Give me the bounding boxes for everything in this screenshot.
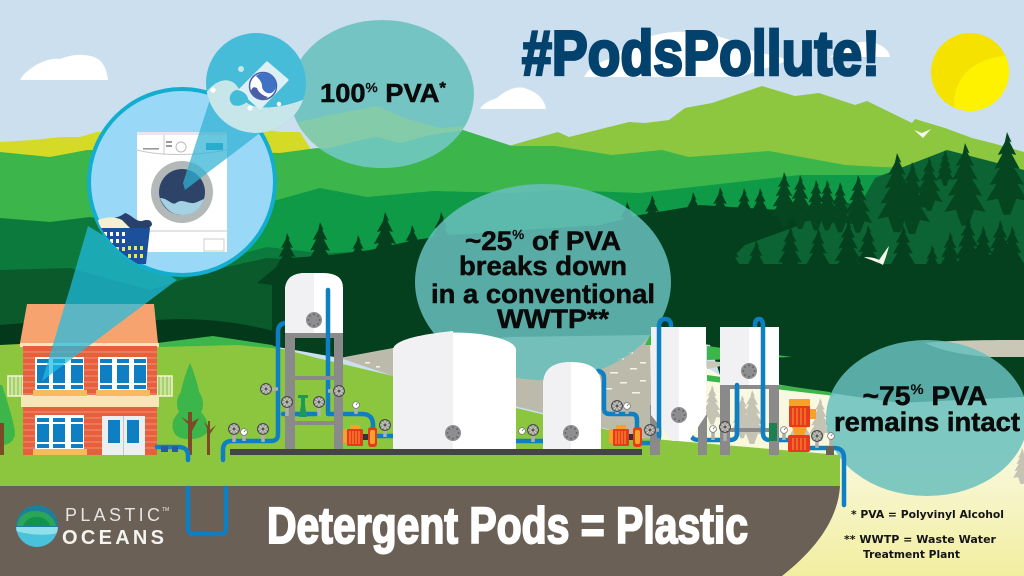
text: 75% remains intact: PVA bbox=[924, 381, 988, 411]
footnote: WWTP: Treatment Plant bbox=[863, 549, 960, 561]
brick wall bbox=[23, 346, 157, 455]
door bbox=[102, 416, 145, 455]
dark forest mass bbox=[257, 205, 1024, 403]
text: 75% remains intact: % bbox=[911, 381, 924, 397]
text: 100% PVA: % bbox=[366, 80, 378, 95]
dark foreground-top trees bbox=[770, 132, 1024, 234]
house bbox=[8, 304, 172, 455]
tree centre bbox=[172, 363, 208, 455]
circle: washing machine bbox=[89, 89, 275, 275]
roof bbox=[20, 304, 158, 343]
logo: Plastic Oceans: OCEANS bbox=[62, 527, 164, 549]
text: 25% breaks down: % bbox=[512, 227, 525, 242]
laundry basket bbox=[98, 213, 152, 264]
footnotes bbox=[844, 509, 1004, 561]
platform bbox=[230, 449, 642, 455]
pump 3 vertical bbox=[788, 399, 816, 452]
text: 25% breaks down: in a conventional bbox=[431, 279, 655, 309]
logo: Plastic Oceans bbox=[16, 505, 169, 549]
upper windows bbox=[35, 357, 147, 449]
pipes bbox=[157, 290, 844, 534]
floor band bbox=[21, 395, 159, 407]
tank: elevated bbox=[285, 273, 343, 449]
footnote: PVA: * PVA = Polyvinyl Alcohol bbox=[851, 509, 1004, 521]
mid forest layer bbox=[700, 150, 1024, 290]
grass ground bbox=[0, 344, 840, 487]
text: 100% PVA: PVA bbox=[378, 78, 440, 108]
bare tree bbox=[204, 421, 216, 455]
pump 1 bbox=[343, 425, 377, 447]
tank: medium bbox=[543, 362, 601, 449]
text: 75% remains intact: remains intact bbox=[834, 407, 1020, 437]
text: 100% PVA: 100 bbox=[320, 78, 363, 108]
text: 25% breaks down: of PVA bbox=[524, 226, 621, 256]
tank: raised square bbox=[720, 327, 779, 455]
beam: washer to pod bbox=[183, 90, 260, 190]
title: #PodsPollute! bbox=[522, 19, 880, 89]
left tree line bbox=[274, 187, 773, 287]
darker green hills bbox=[90, 175, 1024, 340]
icon: pod bbox=[240, 63, 287, 108]
tank: hopper bbox=[650, 327, 707, 455]
bubble: 25% breaks down bbox=[415, 184, 671, 380]
logo: Plastic Oceans: TM bbox=[162, 507, 169, 513]
headline: Detergent Pods = Plastic: Detergent Pods = Plastic bbox=[267, 497, 748, 554]
trees bbox=[0, 363, 216, 455]
bubble: 75% remains intact bbox=[826, 340, 1024, 496]
balconies bbox=[8, 376, 172, 396]
circle: detergent pod bbox=[205, 33, 310, 135]
lower forest pines bbox=[686, 218, 1024, 298]
icon: birds bbox=[864, 129, 931, 265]
icon: sun bbox=[931, 33, 1012, 115]
footnote: WWTP bbox=[844, 534, 997, 561]
tree left edge bbox=[0, 385, 15, 455]
valves and gauges bbox=[161, 384, 834, 455]
pump 2 bbox=[609, 425, 642, 447]
clouds bbox=[20, 32, 890, 109]
bubble: 100% PVA bbox=[294, 20, 474, 168]
mid green hills bbox=[0, 130, 1024, 320]
text: 25% breaks down: breaks down bbox=[459, 251, 627, 281]
solid lower forest bbox=[640, 264, 1024, 298]
text: 25% breaks down: ~25 bbox=[465, 226, 511, 256]
forest bbox=[257, 132, 1024, 403]
river area with grey trees bbox=[340, 333, 1024, 576]
light green mountain bbox=[460, 86, 1024, 300]
logo mark bbox=[16, 505, 58, 548]
text: 100% PVA: * bbox=[439, 80, 447, 97]
darkest band and light strip above lawn bbox=[0, 318, 300, 360]
soil ground band bbox=[0, 486, 840, 576]
beam: house to washer bbox=[42, 226, 177, 381]
washing machine bbox=[137, 132, 227, 252]
text: 75% remains intact bbox=[834, 381, 1020, 437]
footnote: WWTP: ** WWTP = Waste Water bbox=[844, 534, 997, 546]
yellow-green ridge bbox=[0, 132, 310, 200]
text: 75% remains intact: ~75 bbox=[862, 381, 908, 411]
text: 25% breaks down bbox=[431, 226, 655, 334]
logo wordmark: PLASTIC bbox=[65, 505, 160, 525]
text: 25% breaks down: WWTP** bbox=[497, 304, 610, 334]
tank: large bbox=[393, 331, 516, 449]
mountains bbox=[0, 86, 1024, 345]
